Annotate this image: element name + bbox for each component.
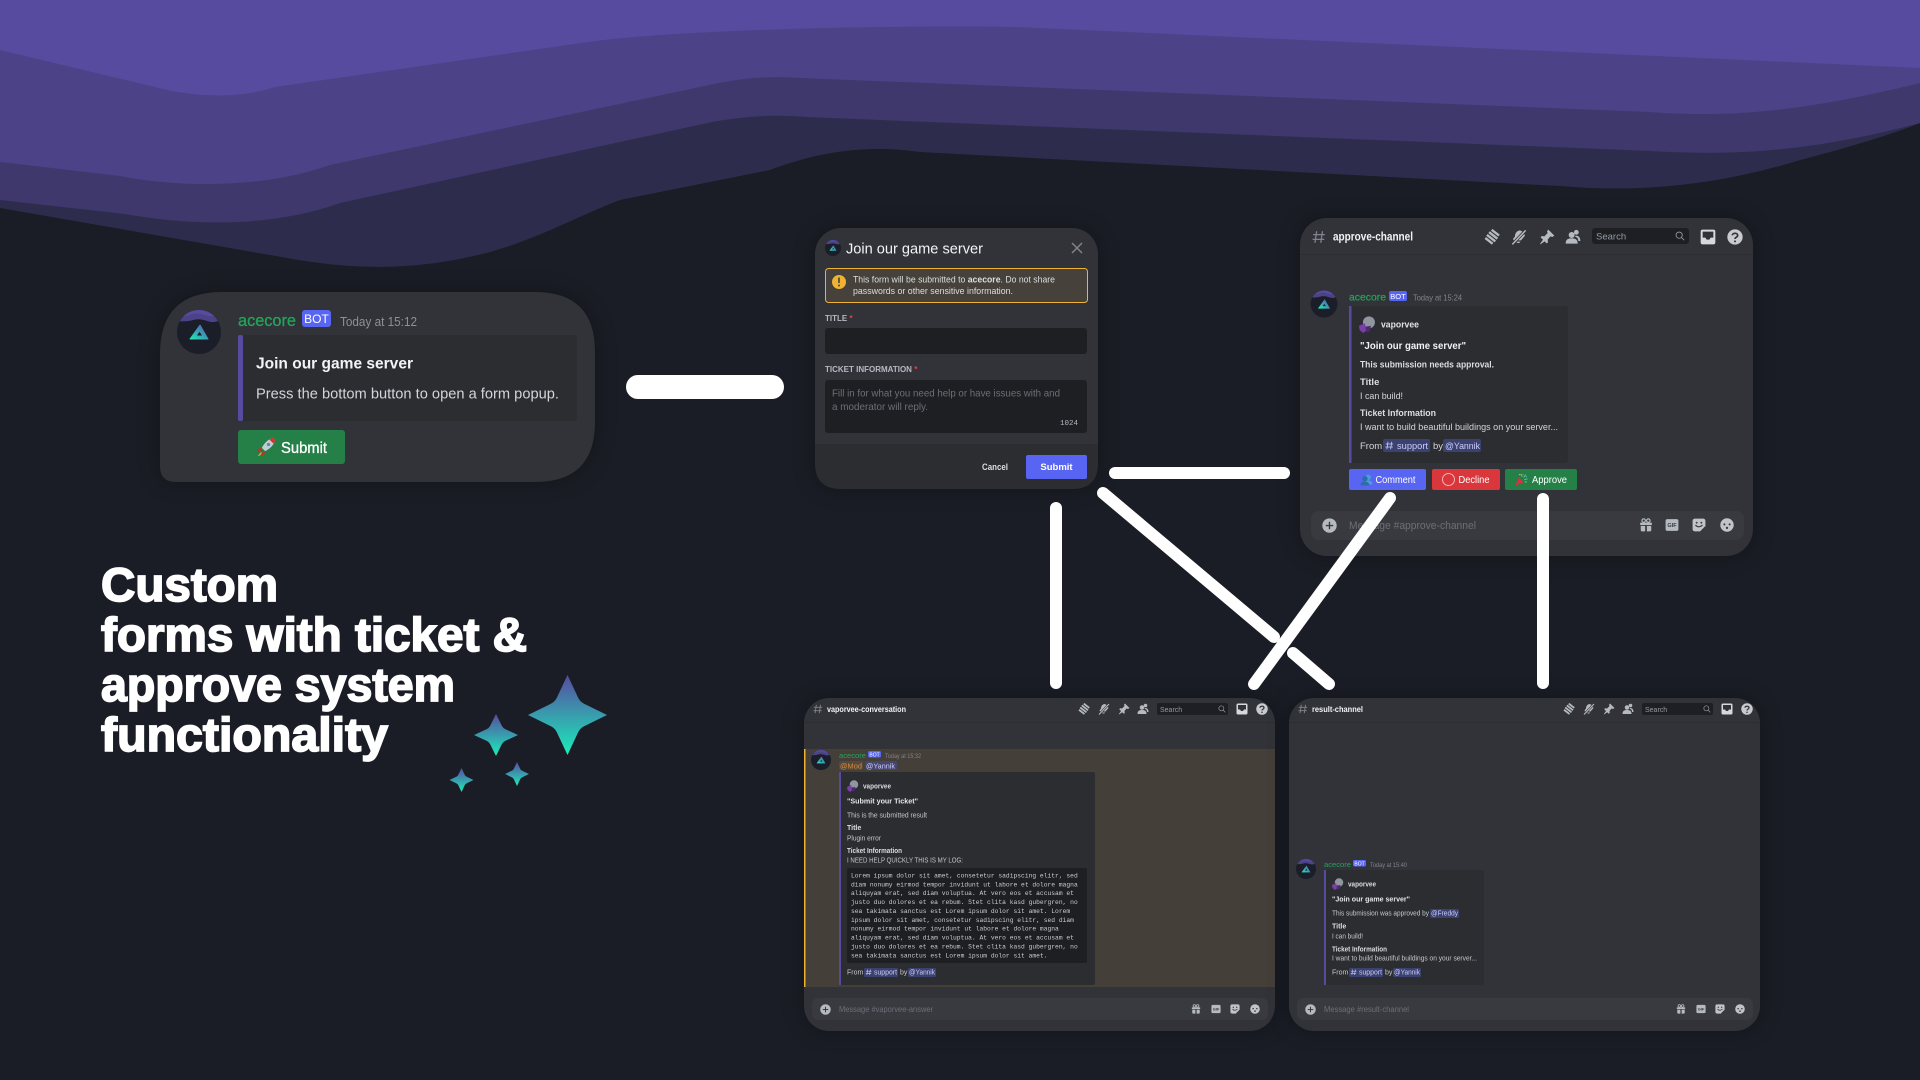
ticket embed: @Yannik	[909, 970, 935, 976]
approval embed: Ticket Information	[1360, 408, 1436, 419]
result embed: by	[1385, 970, 1393, 976]
heading: functionality	[101, 708, 388, 761]
result embed: @Freddy	[1431, 910, 1458, 918]
ticket embed: Plugin error	[847, 836, 882, 842]
result embed: @Yannik	[1394, 970, 1420, 976]
channel header	[1298, 703, 1753, 715]
code block: sea takimata sanctus est Lorem ipsum dolor sit amet.	[851, 952, 1048, 959]
message author row: Today at 15:12	[340, 314, 417, 329]
ticket information field: a moderator will reply.	[832, 401, 928, 413]
ticket information field	[825, 365, 1087, 433]
arrow: form to result channel connector	[1103, 493, 1329, 684]
icon: sparkle stars	[450, 675, 607, 792]
icon: acecore avatar	[1310, 290, 1338, 318]
ticket embed: I NEED HELP QUICKLY THIS IS MY LOG:	[847, 858, 963, 864]
message input: Message #approve-channel	[1349, 520, 1476, 532]
ticket embed: vaporvee	[863, 784, 891, 790]
mentions: @Yannik	[866, 761, 895, 770]
highlighted mention message background	[804, 749, 1275, 987]
form header: Join our game server	[846, 240, 983, 258]
heading: approve system	[101, 658, 455, 711]
comment button: Comment	[1376, 475, 1416, 486]
channel header	[1313, 228, 1743, 245]
message author row: BOT	[304, 312, 330, 326]
form header	[825, 240, 1082, 258]
message embed: Press the bottom button to open a form popup.	[256, 386, 559, 402]
result embed: I can build!	[1332, 934, 1363, 940]
message author row	[839, 751, 922, 760]
heading	[101, 558, 527, 761]
approval embed: @Yannik	[1445, 441, 1480, 452]
code block: Lorem ipsum dolor sit amet, consetetur sadipscing elitr, sed	[851, 872, 1078, 879]
ticket embed: Ticket Information	[847, 848, 902, 855]
ticket information field: Fill in for what you need help or have issues with and	[832, 388, 1060, 400]
approval embed: From	[1360, 441, 1382, 452]
channel header: Search	[1645, 707, 1667, 714]
result embed: From	[1332, 970, 1348, 976]
message author row: acecore	[1324, 860, 1351, 869]
approval embed: This submission needs approval.	[1360, 360, 1494, 370]
comment button	[1349, 469, 1426, 490]
arrow: message to form connector	[626, 375, 784, 399]
approve button: Approve	[1532, 475, 1567, 486]
code block: sea takimata sanctus est Lorem ipsum dolor sit amet. Lorem	[851, 908, 1070, 915]
code block: nonumy eirmod tempor invidunt ut labore et dolore magna	[851, 926, 1059, 933]
icon: acecore avatar	[811, 750, 831, 770]
ticket embed: "Submit your Ticket"	[847, 796, 918, 806]
message author row: acecore	[238, 311, 296, 330]
code block: aliquyam erat, sed diam voluptua. At vero eos et accusam et	[851, 890, 1074, 897]
ticket embed	[839, 772, 1095, 985]
ticket embed: Title	[847, 825, 861, 832]
code block: ipsum dolor sit amet, consetetur sadipscing elitr, sed diam	[851, 917, 1074, 924]
heading: Custom	[101, 558, 278, 611]
warning notice: This form will be submitted to acecore. Do not share	[853, 274, 1055, 286]
panel: vaporvee conversation channel	[804, 698, 1275, 1031]
panel: discord message with submit button	[160, 292, 595, 482]
message author row: BOT	[1390, 292, 1406, 301]
approval embed	[1349, 306, 1568, 463]
panel: form popup	[815, 228, 1098, 489]
cancel action: Cancel	[982, 462, 1008, 473]
message embed: Join our game server	[256, 356, 413, 372]
ticket information field: 1024	[1060, 420, 1078, 428]
approval embed: I can build!	[1360, 391, 1403, 402]
message embed	[238, 335, 577, 421]
channel header: Search	[1160, 707, 1182, 714]
message input: Message #result-channel	[1324, 1005, 1409, 1014]
approve button	[1505, 469, 1577, 490]
warning notice: passwords or other sensitive information.	[853, 286, 1013, 297]
channel header	[813, 703, 1268, 715]
message author row: Today at 15:24	[1413, 292, 1462, 302]
result embed: This submission was approved by	[1332, 910, 1429, 918]
submit button: Submit	[281, 440, 328, 457]
channel header: approve-channel	[1333, 232, 1413, 244]
message author row: acecore	[839, 751, 866, 760]
message author row: BOT	[869, 752, 880, 758]
result embed: "Join our game server"	[1332, 894, 1410, 904]
code block: justo duo dolores et ea rebum. Stet clita kasd gubergren, no	[851, 899, 1078, 906]
panel: result channel	[1289, 698, 1760, 1031]
code block	[847, 868, 1087, 963]
title field	[825, 314, 1087, 354]
heading: forms with ticket &	[101, 608, 527, 661]
code block: diam nonumy eirmod tempor invidunt ut labore et dolore magna	[851, 881, 1078, 888]
icon: acecore avatar	[177, 310, 221, 354]
arrow: approve button to result channel connector	[1537, 499, 1549, 683]
ticket embed: by	[900, 970, 908, 976]
result embed: Title	[1332, 924, 1346, 930]
approval embed: Title	[1360, 377, 1379, 388]
title field: TITLE *	[825, 314, 853, 323]
approval embed: "Join our game server"	[1360, 340, 1466, 352]
warning notice	[826, 268, 1088, 302]
icon: acecore avatar	[1296, 859, 1316, 879]
mentions	[839, 761, 897, 770]
ticket information field: TICKET INFORMATION *	[825, 365, 918, 374]
message author row	[238, 310, 417, 330]
channel header: result-channel	[1312, 704, 1363, 714]
arrow: form to approve channel connector	[1115, 467, 1284, 479]
arrow: form to conversation connector	[1050, 508, 1062, 683]
decline button	[1432, 469, 1500, 490]
code block: justo duo dolores et ea rebum. Stet clita kasd gubergren, no	[851, 943, 1078, 950]
result embed: support	[1359, 970, 1382, 976]
message author row	[1324, 860, 1408, 869]
message author row: BOT	[1354, 862, 1365, 868]
approval embed: vaporvee	[1381, 320, 1419, 330]
channel header: Search	[1596, 232, 1626, 242]
decline button: Decline	[1458, 475, 1490, 486]
ticket embed: From	[847, 970, 864, 976]
arrow: comment button to conversation connector	[1254, 498, 1390, 684]
message input	[1297, 998, 1753, 1020]
message author row: Today at 15:32	[885, 754, 922, 760]
message author row: Today at 15:40	[1370, 863, 1408, 869]
code block: aliquyam erat, sed diam voluptua. At vero eos et accusam et	[851, 934, 1074, 942]
submit button	[238, 430, 345, 464]
submit action	[1026, 455, 1087, 479]
message input	[812, 998, 1268, 1020]
channel header: vaporvee-conversation	[827, 704, 906, 714]
result embed	[1324, 870, 1484, 985]
ticket embed: This is the submitted result	[847, 812, 927, 820]
ticket embed: support	[874, 970, 897, 976]
message author row	[1349, 291, 1462, 304]
submit action: Submit	[1040, 462, 1073, 473]
result embed: Ticket Information	[1332, 946, 1387, 954]
approval embed: by	[1433, 441, 1443, 452]
message author row: acecore	[1349, 292, 1386, 304]
message input	[1311, 511, 1744, 540]
result embed: I want to build beautiful buildings on your server...	[1332, 956, 1477, 962]
mentions: @Mod	[840, 761, 862, 770]
approval embed: I want to build beautiful buildings on your server...	[1360, 422, 1558, 433]
message input: Message #vaporvee-answer	[839, 1005, 933, 1014]
panel: approve channel	[1300, 218, 1753, 556]
result embed: vaporvee	[1348, 882, 1376, 888]
form footer	[815, 444, 1098, 489]
decorative purple wave header	[0, 0, 1920, 267]
approval embed: support	[1397, 441, 1428, 452]
